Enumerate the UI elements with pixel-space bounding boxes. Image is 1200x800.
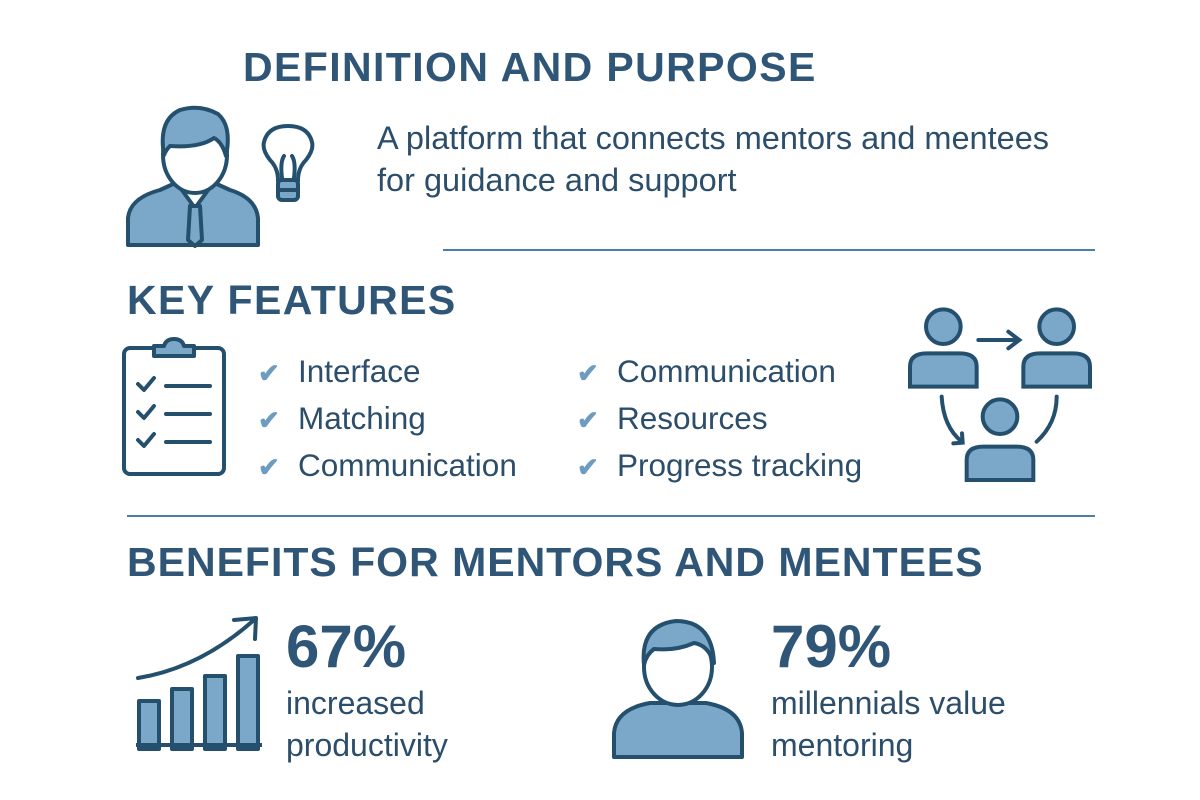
- heading: key features: KEY FEATURES: [127, 277, 457, 323]
- icon: person: [612, 619, 744, 759]
- stat: 67%: [286, 613, 448, 763]
- stat: 67%: increased: [286, 685, 425, 721]
- list: features column 2: ✔: [577, 405, 599, 435]
- list: features column 2: [577, 353, 862, 483]
- stat: 79%: [771, 613, 1006, 763]
- list: features column 2: Progress tracking: [617, 447, 862, 483]
- icon: light bulb: [262, 124, 314, 202]
- list: features column 1: [258, 353, 517, 483]
- icon: businessman: [126, 106, 260, 248]
- list: features column 1: Interface: [298, 353, 421, 389]
- list: features column 2: ✔: [577, 452, 599, 482]
- list: features column 1: ✔: [258, 358, 280, 388]
- list: features column 2: Resources: [617, 400, 768, 436]
- list: features column 2: ✔: [577, 358, 599, 388]
- stat: 67%: productivity: [286, 727, 448, 763]
- list: features column 1: Matching: [298, 400, 426, 436]
- list: features column 1: ✔: [258, 405, 280, 435]
- text: definition: [377, 120, 1049, 198]
- icon: people network: [908, 307, 1092, 482]
- icon: bar chart: [136, 616, 262, 751]
- heading: benefits: BENEFITS FOR MENTORS AND MENTEES: [127, 539, 984, 585]
- stat: 79%: 79%: [771, 613, 891, 680]
- icon: clipboard: [122, 337, 226, 476]
- list: features column 1: ✔: [258, 452, 280, 482]
- text: definition: A platform that connects mentors and mentees: [377, 120, 1049, 156]
- stat: 79%: mentoring: [771, 727, 913, 763]
- list: features column 2: Communication: [617, 353, 836, 389]
- list: features column 1: Communication: [298, 447, 517, 483]
- text: definition: for guidance and support: [377, 162, 737, 198]
- title: definition and purpose: DEFINITION AND PURPOSE: [243, 44, 817, 90]
- stat: 79%: millennials value: [771, 685, 1006, 721]
- stat: 67%: 67%: [286, 613, 406, 680]
